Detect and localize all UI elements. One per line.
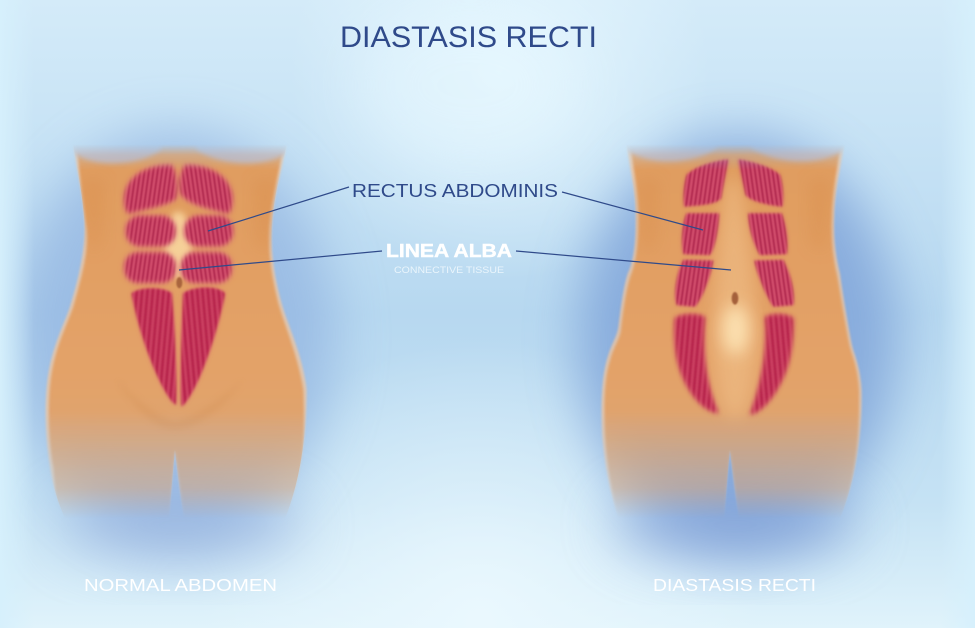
caption: diastasis recti: DIASTASIS RECTI xyxy=(653,575,816,595)
rectus abdominis muscles, separated xyxy=(671,158,797,418)
crotch line xyxy=(728,423,734,433)
title: DIASTASIS RECTI xyxy=(340,21,597,54)
crotch line xyxy=(172,423,178,435)
figure: normal abdomen xyxy=(46,137,307,523)
label: linea alba: LINEA ALBA xyxy=(386,241,512,261)
leader lines: rectus abdominis xyxy=(208,187,703,231)
navel xyxy=(732,292,738,305)
caption: normal abdomen: NORMAL ABDOMEN xyxy=(84,575,277,595)
figure: diastasis recti xyxy=(602,133,862,523)
label: connective tissue: CONNECTIVE TISSUE xyxy=(394,265,504,276)
torso skin xyxy=(602,133,862,523)
torso skin xyxy=(46,137,307,523)
navel xyxy=(176,277,182,288)
leader lines: linea alba xyxy=(179,251,731,270)
label: rectus abdominis: RECTUS ABDOMINIS xyxy=(352,180,558,201)
rectus abdominis muscles xyxy=(120,162,236,408)
